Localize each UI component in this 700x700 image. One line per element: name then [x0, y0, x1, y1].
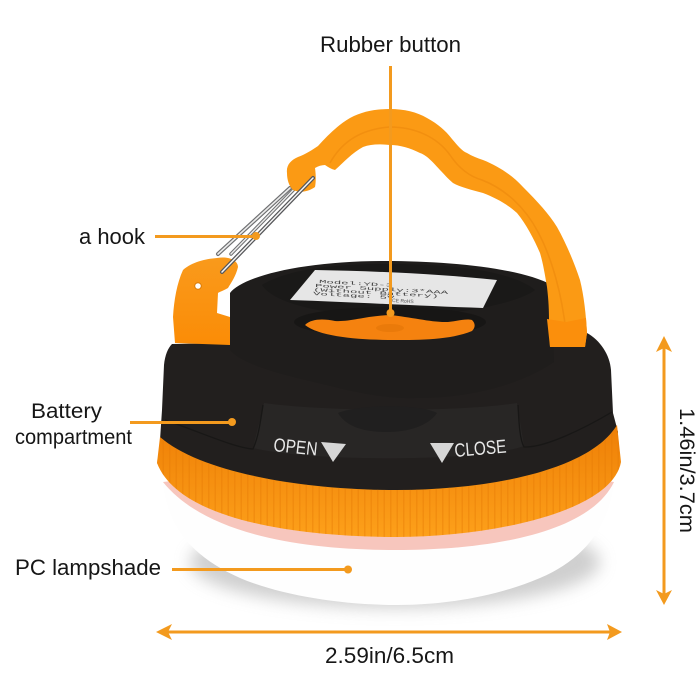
height dimension arrow [656, 336, 672, 605]
door panel [253, 403, 524, 458]
callout: a hook: a hook [79, 224, 146, 249]
callout: PC lampshade: PC lampshade [15, 555, 161, 580]
handle [287, 109, 587, 347]
carabiner mount [173, 257, 238, 345]
callout: Rubber button: Rubber button [320, 32, 461, 57]
lamp shadow [190, 516, 600, 608]
OPEN marking: OPEN [272, 435, 318, 461]
callout: Battery compartment: Battery [31, 400, 103, 423]
callout: Battery compartment [15, 400, 236, 449]
top recess [262, 264, 535, 316]
CLOSE marking [430, 437, 507, 463]
label sticker: Model:YD-3 [319, 279, 394, 288]
callout: Rubber button [320, 32, 461, 317]
upper black tier [230, 261, 554, 398]
center grip [338, 406, 437, 432]
height label: 1.46in/3.7cm [675, 408, 698, 533]
handle ridge [330, 127, 566, 332]
width label: 2.59in/6.5cm [325, 643, 454, 668]
orange ring [157, 425, 621, 537]
CLOSE marking: CLOSE [454, 437, 507, 462]
label sticker [290, 270, 497, 308]
label sticker: (Without Battery) [313, 287, 439, 299]
label sticker: CE RoHS [392, 298, 415, 305]
label sticker: Voltage: 5V [313, 291, 395, 301]
callout: a hook [79, 224, 260, 249]
PC lampshade [163, 482, 614, 605]
width dimension arrow [156, 624, 622, 640]
handle base [547, 318, 587, 347]
label sticker: Power Supply:3*AAA [315, 283, 449, 296]
callout: Battery compartment: compartment [15, 426, 132, 449]
lens pink rim [163, 480, 614, 550]
carabiner wire [218, 180, 303, 254]
main black body [160, 333, 618, 500]
carabiner front wire [222, 178, 313, 272]
door seams [165, 405, 612, 449]
lamp illustration [157, 109, 621, 605]
rubber button [305, 315, 475, 340]
callout: PC lampshade [15, 555, 352, 580]
button recess [294, 307, 486, 337]
mount hole [195, 283, 201, 289]
